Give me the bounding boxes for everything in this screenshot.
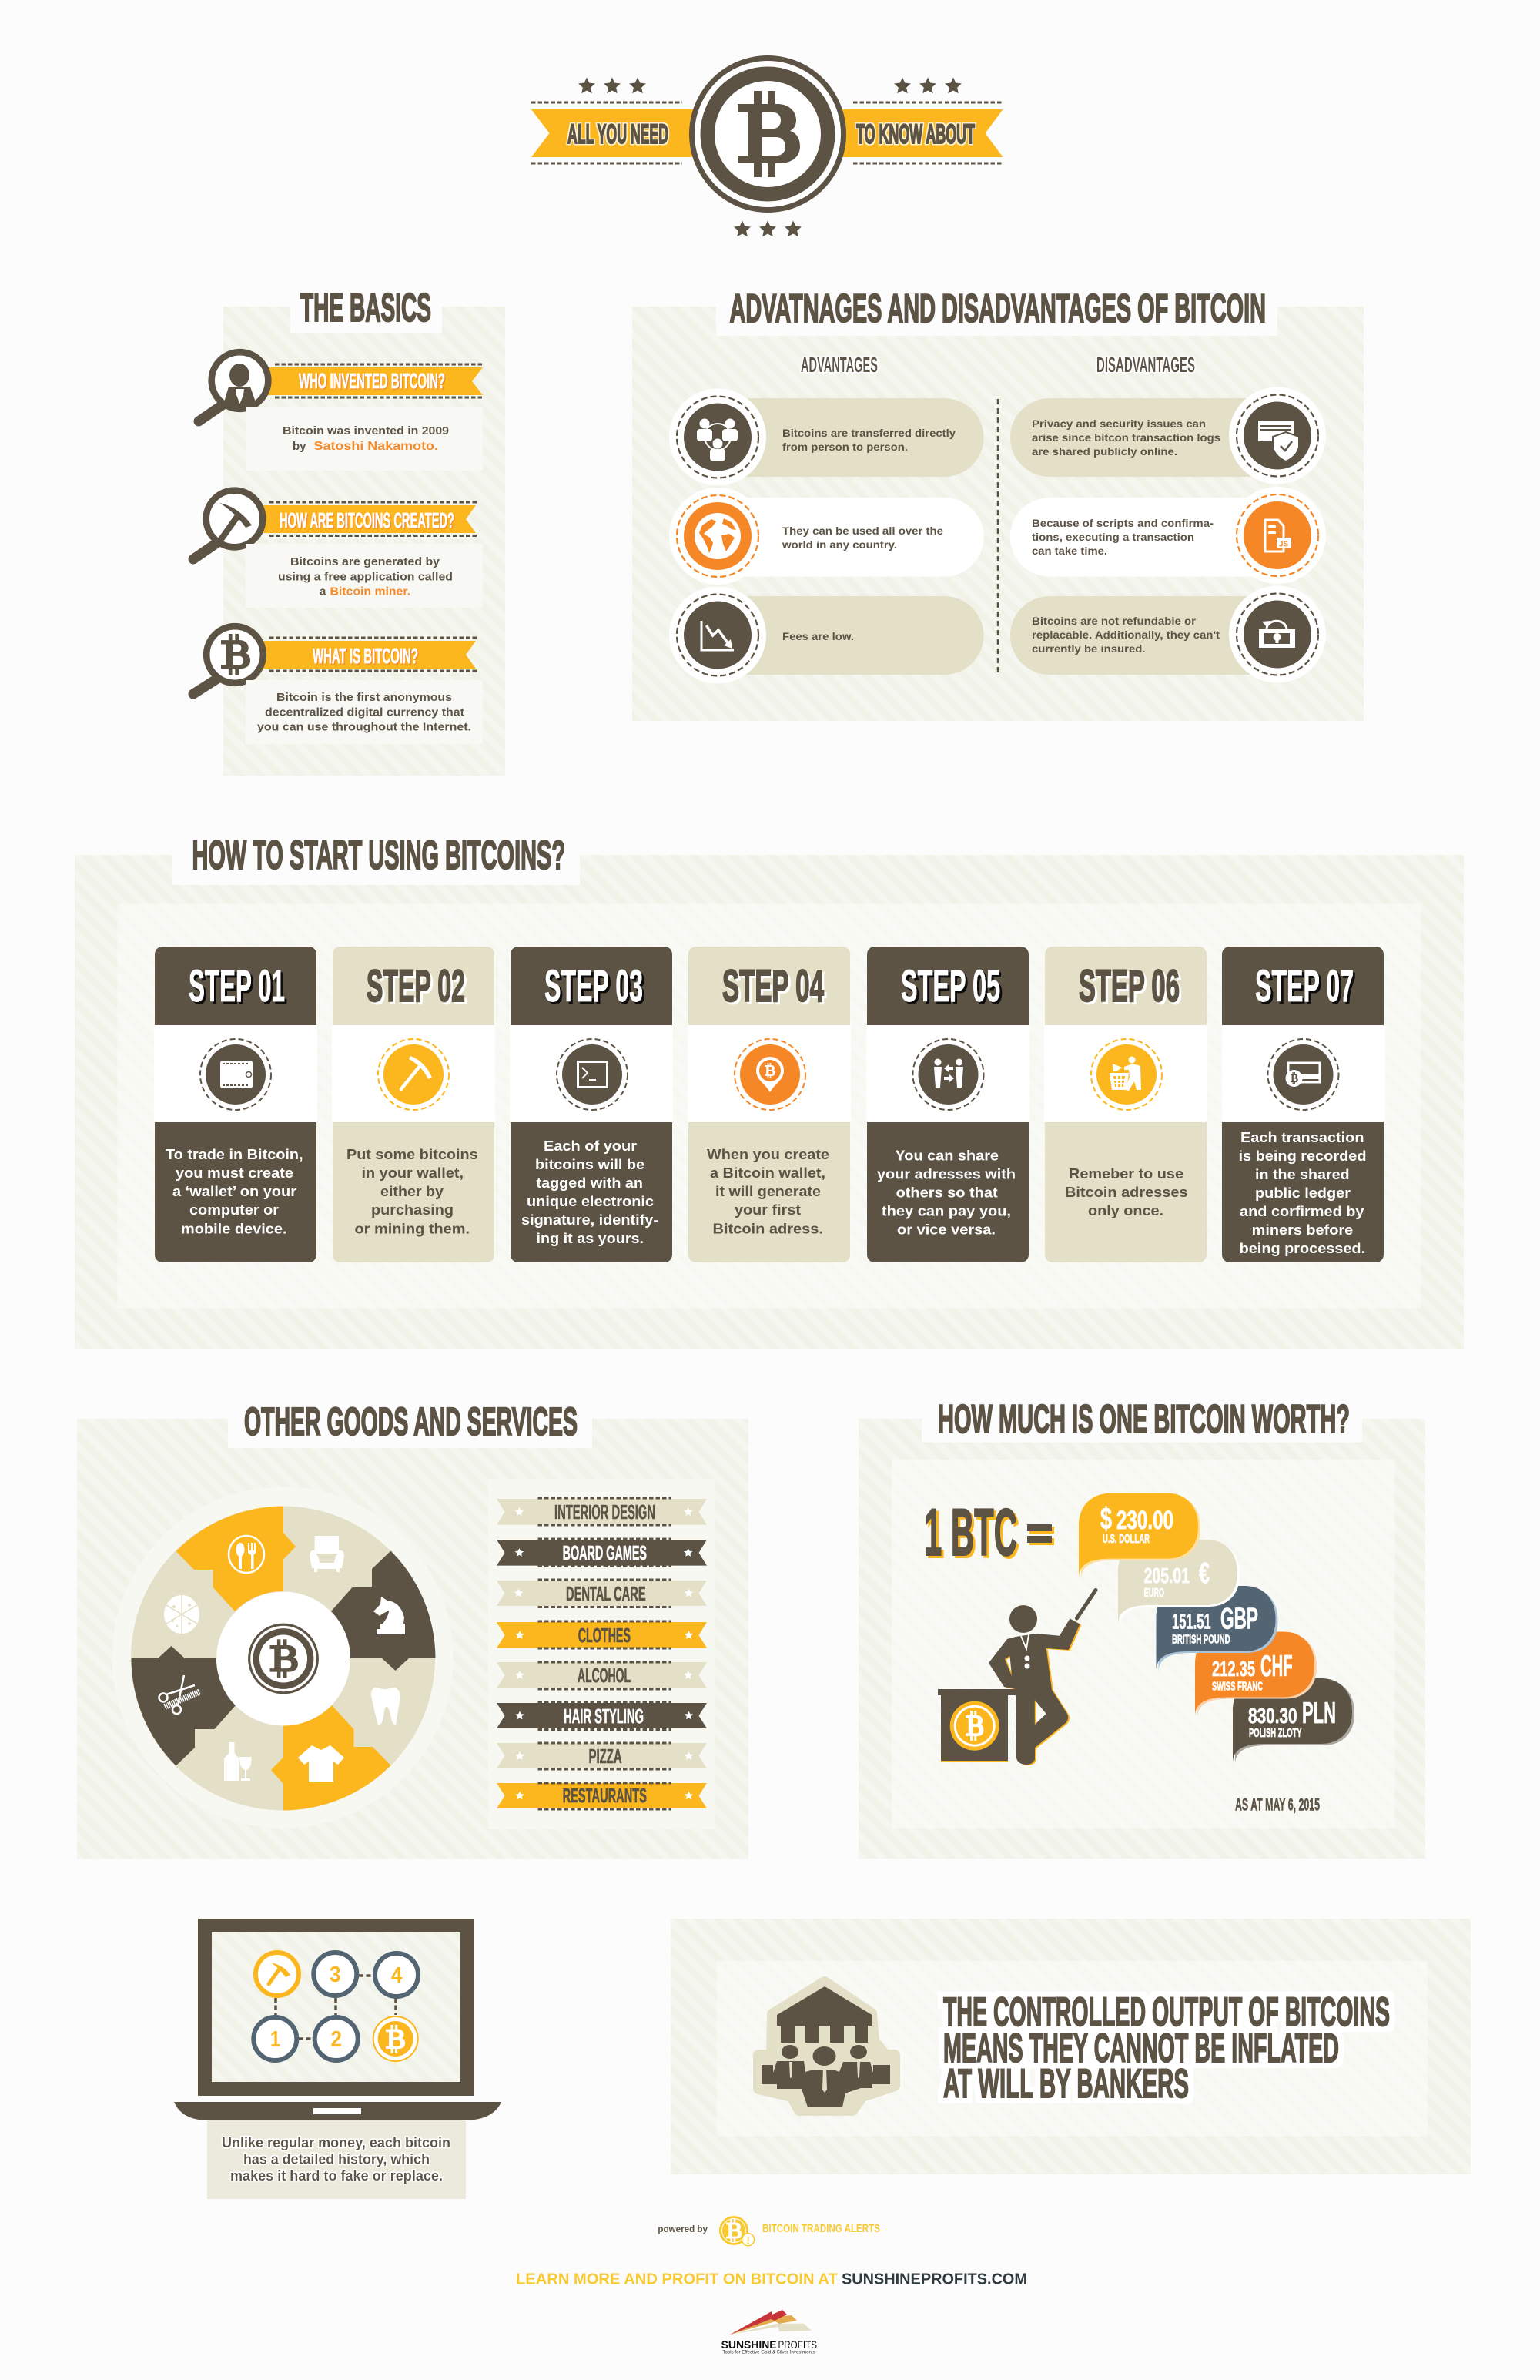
step 02: STEP 02 xyxy=(367,961,465,1011)
powered by line: BITCOIN TRADING ALERTS xyxy=(762,2223,880,2235)
step 06 xyxy=(1044,947,1207,1262)
powered by line: powered by xyxy=(658,2224,708,2234)
icon: scissors and comb xyxy=(159,1675,200,1714)
ribbon: clothes: CLOTHES xyxy=(578,1624,631,1647)
question 1: by xyxy=(293,440,306,453)
question 3: you can use throughout the Internet. xyxy=(257,721,471,733)
panel: the basics xyxy=(193,285,505,776)
sunshine profits logo: PROFITS xyxy=(778,2339,817,2351)
question 2: Bitcoins are generated by xyxy=(290,555,440,568)
step 04 xyxy=(688,947,851,1262)
chain: node 4: 4 xyxy=(391,1963,402,1988)
powered by line: ! xyxy=(747,2234,750,2246)
bubble: british pound: GBP xyxy=(1220,1603,1258,1636)
step 03: ing it as yours. xyxy=(536,1231,644,1246)
step 01: a ‘wallet’ on your xyxy=(172,1184,296,1199)
panel: other goods and services xyxy=(77,1398,748,1859)
step 06: STEP 06 xyxy=(1079,961,1180,1011)
disadvantage: slow confirmations xyxy=(1010,487,1326,584)
chain: node 1 xyxy=(253,2017,296,2060)
step 04: it will generate xyxy=(715,1184,821,1199)
laptop with mining chain xyxy=(174,1919,501,2199)
icon: shirt xyxy=(298,1745,344,1782)
disadvantage: no refunds: Bitcoins are not refundable or xyxy=(1032,615,1197,627)
step 07: miners before xyxy=(1252,1222,1353,1238)
advantage: direct transfer: Bitcoins are transferred directly xyxy=(782,427,956,439)
question 3 xyxy=(193,626,483,744)
step 07: and corfirmed by xyxy=(1240,1204,1364,1219)
ribbon: restaurants xyxy=(497,1783,707,1809)
disadvantage: slow confirmations: JS xyxy=(1279,541,1288,548)
ribbon: interior design: INTERIOR DESIGN xyxy=(554,1500,655,1524)
step 07 xyxy=(1222,947,1385,1262)
step 07: being processed. xyxy=(1240,1241,1365,1256)
services wheel xyxy=(112,1487,453,1829)
icon: pizza xyxy=(164,1595,199,1634)
step 02: Put some bitcoins xyxy=(346,1147,478,1162)
bubble: polish zloty: PLN xyxy=(1302,1697,1336,1730)
panel: how to start using bitcoins xyxy=(75,833,1464,1349)
question 3: Bitcoin is the first anonymous xyxy=(276,691,452,704)
step 06: Bitcoin adresses xyxy=(1065,1185,1187,1200)
chain: bitcoin xyxy=(373,2016,419,2062)
heading: other goods: OTHER GOODS AND SERVICES xyxy=(244,1400,578,1443)
advantage: low fees: Fees are low. xyxy=(782,631,854,642)
column heading: disadvantages: DISADVANTAGES xyxy=(1096,353,1195,377)
step 03: Each of your xyxy=(544,1138,637,1154)
panel: advantages and disadvantages xyxy=(632,285,1364,721)
icon: bank and bankers xyxy=(758,1982,895,2110)
statement text: AT WILL BY BANKERS xyxy=(943,2061,1189,2107)
step 01: STEP 01 xyxy=(189,961,285,1011)
chain: node 3 xyxy=(313,1953,357,1996)
step 02: or mining them. xyxy=(354,1222,470,1237)
step 05: they can pay you, xyxy=(882,1203,1011,1218)
caption box: Unlike regular money, each bitcoin xyxy=(222,2135,450,2150)
ribbon: pizza xyxy=(497,1743,707,1769)
step 07: public ledger xyxy=(1255,1185,1351,1201)
question 1: Satoshi Nakamoto. xyxy=(314,440,438,453)
question 2: using a free application called xyxy=(278,570,453,584)
chain: node 1: 1 xyxy=(270,2027,280,2052)
step 01: mobile device. xyxy=(181,1222,286,1237)
bitcoin coin emblem xyxy=(689,55,846,213)
step 04: a Bitcoin wallet, xyxy=(710,1165,825,1181)
step 01: you must create xyxy=(176,1165,293,1181)
title ribbon left xyxy=(531,109,693,157)
ribbon: dental care: DENTAL CARE xyxy=(566,1582,646,1605)
title ribbon right xyxy=(842,109,1003,157)
sunshine profits logo xyxy=(721,2310,817,2355)
disadvantage: privacy: Privacy and security issues can xyxy=(1032,418,1206,430)
chain: node 3: 3 xyxy=(330,1963,340,1987)
step 06: only once. xyxy=(1088,1203,1163,1218)
bubble: euro: 205.01 xyxy=(1144,1564,1190,1587)
step 07: is being recorded xyxy=(1238,1148,1366,1164)
advantage: low fees xyxy=(669,587,984,684)
step 04: When you create xyxy=(707,1147,829,1162)
step 03: STEP 03 xyxy=(544,961,643,1011)
advantage: global use: world in any country. xyxy=(782,539,897,551)
panel: controlled output xyxy=(671,1919,1471,2174)
step 04: STEP 04 xyxy=(722,961,824,1011)
bubble: polish zloty: 830.30 xyxy=(1248,1704,1297,1728)
bubble: euro: € xyxy=(1199,1557,1210,1590)
stars xyxy=(578,77,962,236)
question 3: WHAT IS BITCOIN? xyxy=(313,644,418,668)
step 01 xyxy=(154,947,317,1262)
bubble: us dollar: $ xyxy=(1100,1502,1112,1536)
icon: chess knight xyxy=(373,1597,405,1634)
call to action: LEARN MORE AND PROFIT ON BITCOIN AT xyxy=(516,2271,838,2288)
wheel segment: clothes xyxy=(271,1705,391,1810)
bubble: british pound xyxy=(1157,1586,1278,1672)
bubble: euro xyxy=(1118,1540,1240,1626)
ribbon: alcohol xyxy=(497,1662,707,1689)
step 07: Each transaction xyxy=(1240,1130,1364,1145)
disadvantage: privacy: arise since bitcon transaction logs xyxy=(1032,432,1220,444)
wheel segment: restaurants xyxy=(176,1507,296,1611)
ribbon: hair styling xyxy=(497,1702,707,1730)
step 02 xyxy=(332,947,495,1262)
icon: armchair xyxy=(310,1536,344,1572)
call to action: SUNSHINEPROFITS.COM xyxy=(842,2271,1027,2288)
step 07: in the shared xyxy=(1255,1167,1350,1182)
footer xyxy=(516,2216,1027,2355)
panel: how much is one bitcoin worth xyxy=(859,1397,1425,1859)
question 2 xyxy=(193,491,483,608)
title emblem xyxy=(531,55,1003,236)
title ribbon left: ALL YOU NEED xyxy=(567,119,668,149)
bubble: swiss franc: 212.35 xyxy=(1212,1657,1255,1681)
step 02: either by xyxy=(380,1184,444,1199)
step 07: STEP 07 xyxy=(1255,961,1354,1011)
disadvantage: slow confirmations: Because of scripts and confirma- xyxy=(1032,518,1214,529)
ribbon: board games xyxy=(497,1539,707,1567)
services list xyxy=(488,1479,715,1829)
advantage: direct transfer xyxy=(669,388,984,485)
wheel segment: board games xyxy=(331,1551,436,1671)
question 1: WHO INVENTED BITCOIN? xyxy=(299,369,445,393)
ribbon: dental care xyxy=(497,1580,707,1607)
sunshine profits logo: Tools for Effective Gold & Silver Investments xyxy=(722,2350,815,2355)
chain: pick xyxy=(256,1953,299,1996)
step 04: your first xyxy=(735,1202,801,1218)
column heading: advantages: ADVANTAGES xyxy=(801,353,878,377)
ribbon: hair styling: HAIR STYLING xyxy=(564,1705,644,1728)
icon: bottle and glass xyxy=(224,1742,252,1781)
chain: node 4 xyxy=(375,1953,418,1996)
step 05: or vice versa. xyxy=(897,1222,996,1237)
question 2: a xyxy=(320,585,326,598)
bubble: euro: EURO xyxy=(1144,1587,1164,1600)
step 05: You can share xyxy=(895,1148,999,1163)
disadvantage: privacy: are shared publicly online. xyxy=(1032,446,1177,458)
step 01: To trade in Bitcoin, xyxy=(166,1147,303,1162)
figure: presenter with podium xyxy=(938,1590,1096,1765)
step 04: Bitcoin adress. xyxy=(713,1222,823,1237)
question 2: Bitcoin miner. xyxy=(330,585,410,598)
step 01: computer or xyxy=(189,1202,279,1218)
bubble: swiss franc: CHF xyxy=(1260,1650,1293,1683)
step 03: bitcoins will be xyxy=(535,1157,644,1172)
bubble: polish zloty: POLISH ZLOTY xyxy=(1249,1727,1302,1740)
1 BTC equals xyxy=(924,1496,1052,1570)
chain: node 2 xyxy=(315,2017,358,2060)
1 BTC equals: 1 BTC xyxy=(924,1496,1017,1570)
disadvantage: no refunds: replacable. Additionally, they can't xyxy=(1032,629,1220,641)
icon: tooth xyxy=(371,1688,400,1725)
wheel segment: hair styling xyxy=(131,1646,236,1765)
heading: how to start: HOW TO START USING BITCOINS? xyxy=(192,833,565,878)
disadvantage: privacy xyxy=(1010,387,1326,484)
ribbon: clothes xyxy=(497,1621,707,1648)
ribbon: interior design xyxy=(497,1498,707,1525)
step 02: in your wallet, xyxy=(362,1165,464,1181)
step 05: others so that xyxy=(896,1185,998,1200)
date note: AS AT MAY 6, 2015 xyxy=(1235,1795,1320,1815)
step 05 xyxy=(866,947,1029,1262)
call to action xyxy=(516,2271,1027,2288)
question 3: decentralized digital currency that xyxy=(265,706,464,719)
bubble: british pound: BRITISH POUND xyxy=(1172,1634,1230,1647)
step 03: unique electronic xyxy=(527,1194,654,1209)
icon: cutlery xyxy=(229,1536,264,1573)
ribbon: board games: BOARD GAMES xyxy=(563,1541,647,1564)
statement text xyxy=(943,1989,1390,2107)
ribbon: alcohol: ALCOHOL xyxy=(578,1664,631,1687)
center coin xyxy=(248,1624,319,1694)
step 03 xyxy=(510,947,673,1262)
advantage: global use xyxy=(669,488,984,585)
caption box: has a detailed history, which xyxy=(243,2152,430,2167)
question 2: HOW ARE BITCOINS CREATED? xyxy=(280,508,454,532)
question 1: Bitcoin was invented in 2009 xyxy=(283,424,449,437)
step 03: signature, identify- xyxy=(521,1212,658,1228)
bubble: us dollar xyxy=(1079,1493,1200,1580)
heading: the basics: THE BASICS xyxy=(300,286,431,330)
bubble: swiss franc xyxy=(1195,1631,1317,1718)
bubble: swiss franc: SWISS FRANC xyxy=(1212,1681,1263,1693)
bubble: polish zloty xyxy=(1233,1678,1354,1765)
step 05: your adresses with xyxy=(877,1166,1016,1182)
sunshine profits logo: SUNSHINE xyxy=(721,2339,777,2351)
advantage: direct transfer: from person to person. xyxy=(782,441,908,453)
bubble: british pound: 151.51 xyxy=(1172,1610,1211,1634)
step 02: purchasing xyxy=(371,1202,454,1218)
disadvantage: no refunds: currently be insured. xyxy=(1032,643,1146,655)
caption box: makes it hard to fake or replace. xyxy=(230,2168,443,2184)
question 1 xyxy=(199,352,483,471)
step 06: Remeber to use xyxy=(1069,1166,1183,1182)
disadvantage: slow confirmations: can take time. xyxy=(1032,545,1107,557)
advantage: global use: They can be used all over the xyxy=(782,525,944,537)
ribbon: restaurants: RESTAURANTS xyxy=(563,1784,647,1807)
ribbon: pizza: PIZZA xyxy=(588,1745,622,1768)
caption box xyxy=(207,2120,466,2199)
chain: node 2: 2 xyxy=(331,2027,342,2052)
step 05: STEP 05 xyxy=(901,961,1000,1011)
powered by line xyxy=(658,2216,880,2246)
disadvantage: slow confirmations: tions, executing a transaction xyxy=(1032,531,1194,543)
disadvantage: no refunds xyxy=(1010,585,1326,682)
bubble: us dollar: 230.00 xyxy=(1116,1506,1173,1535)
title ribbon right: TO KNOW ABOUT xyxy=(856,119,975,149)
bubble: us dollar: U.S. DOLLAR xyxy=(1103,1533,1150,1546)
step 03: tagged with an xyxy=(536,1175,643,1191)
